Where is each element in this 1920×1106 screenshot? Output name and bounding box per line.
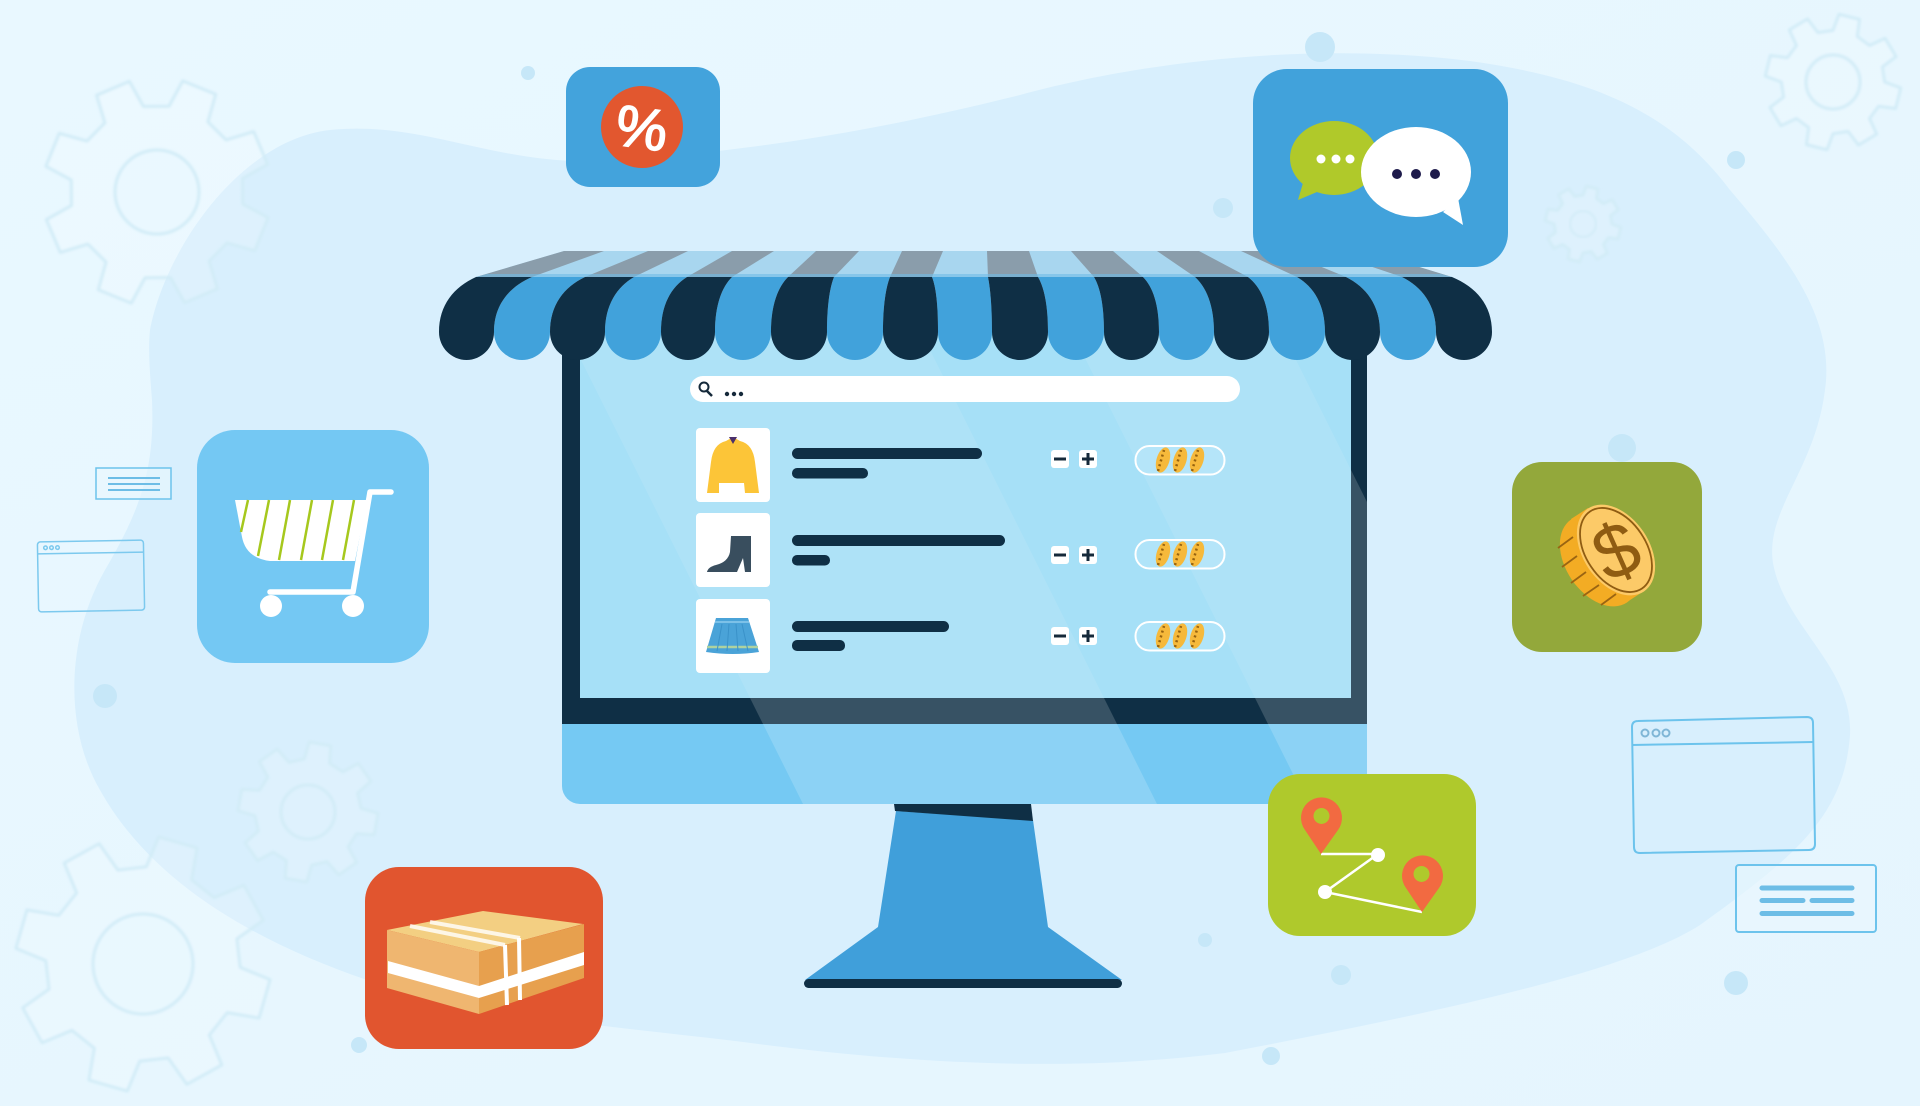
gear: upper right small	[1537, 178, 1629, 270]
cart handle and frame	[270, 492, 391, 592]
product card: skirt	[696, 599, 770, 673]
white speech bubble	[1361, 127, 1471, 225]
icon card: chat	[1253, 69, 1508, 267]
icon card: map route	[1268, 774, 1476, 936]
item text bars	[792, 535, 1005, 566]
gear hole: top right	[1806, 55, 1860, 109]
gear: bottom left	[0, 808, 299, 1106]
cart basket	[235, 500, 367, 561]
gear: lower middle	[228, 732, 388, 892]
coin edge	[1544, 501, 1654, 621]
coin face	[1561, 490, 1671, 610]
monitor frame	[562, 300, 1367, 724]
awning	[439, 251, 1492, 360]
awning blue scallops	[494, 277, 1436, 360]
gear: top left	[10, 45, 304, 339]
map pin 1	[1301, 797, 1342, 854]
awning roof	[476, 251, 1452, 277]
frame and chin reflections	[750, 470, 1367, 804]
product card: boot	[696, 513, 770, 587]
text card: right	[1736, 865, 1876, 932]
icon: magnifier	[700, 382, 712, 396]
product row 2: boot	[696, 513, 1224, 587]
quantity buttons	[1051, 546, 1097, 564]
quantity buttons	[1051, 450, 1097, 468]
cart wheels	[260, 595, 364, 617]
price pill	[1136, 446, 1224, 474]
quantity buttons	[1051, 627, 1097, 645]
price pill	[1136, 622, 1224, 650]
dollar sign: $	[1580, 504, 1653, 599]
green speech bubble	[1290, 121, 1378, 200]
monitor screen	[580, 300, 1351, 698]
search placeholder dots	[725, 392, 743, 396]
gear hole: lower middle	[281, 785, 335, 839]
gear: top right	[1752, 1, 1914, 163]
gear hole: top left	[115, 150, 199, 234]
gear hole: bottom left	[93, 914, 193, 1014]
monitor chin	[562, 724, 1367, 804]
percent sign: %	[612, 93, 672, 164]
icon card: dollar coin	[1512, 462, 1702, 652]
gear hole: upper right small	[1570, 211, 1596, 237]
awning dark scallops	[439, 277, 1492, 360]
monitor	[562, 300, 1367, 988]
icon card: package	[365, 867, 603, 1049]
icon card: shopping cart	[197, 430, 429, 663]
text card: left	[96, 468, 171, 499]
icon card: percent	[566, 67, 720, 187]
price pill	[1136, 540, 1224, 568]
item text bars	[792, 621, 949, 651]
product card: jacket	[696, 428, 770, 502]
cardboard box	[387, 911, 584, 1014]
browser window: left	[37, 540, 145, 612]
route line	[1318, 848, 1422, 912]
product row 1: jacket	[696, 428, 1224, 502]
monitor stand	[804, 804, 1122, 988]
basket stripes	[241, 500, 354, 560]
map pin 2	[1402, 855, 1443, 912]
product row 3: skirt	[696, 599, 1224, 673]
search bar	[690, 376, 1240, 402]
browser window: right	[1632, 717, 1815, 853]
item text bars	[792, 448, 982, 478]
screen reflections	[551, 300, 1518, 804]
